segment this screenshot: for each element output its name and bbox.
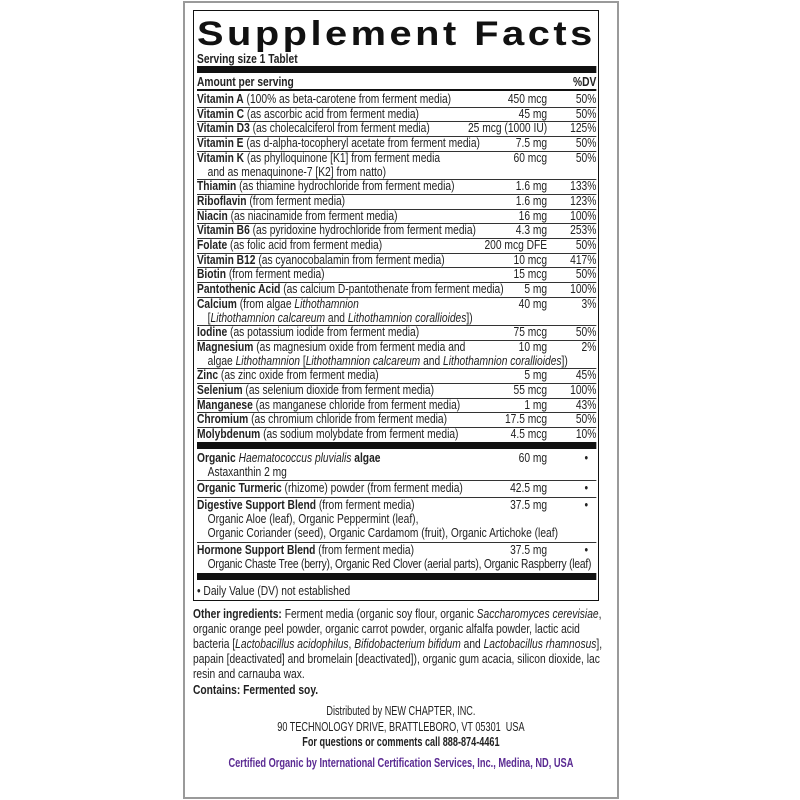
nutrient table [197, 92, 596, 441]
botanical table: Organic Chaste Tree (berry), Organic Red Clover (aerial parts), Organic Raspberry (leaf) [208, 557, 591, 571]
nutrient table: 10% [576, 427, 596, 441]
nutrient table: Vitamin E (as d-alpha-tocopheryl acetate from ferment media) [197, 136, 480, 150]
nutrient table: 16 mg [519, 209, 547, 223]
botanical table: • [585, 543, 588, 557]
nutrient table: Biotin (from ferment media) [197, 267, 325, 281]
nutrient table: Zinc (as zinc oxide from ferment media) [197, 368, 379, 382]
nutrient table: 50% [576, 92, 596, 106]
nutrient table: 50% [576, 238, 596, 252]
nutrient table: 1.6 mg [516, 194, 547, 208]
botanical table: • [585, 498, 588, 512]
botanical table: Astaxanthin 2 mg [208, 465, 287, 479]
distributor info: 90 TECHNOLOGY DRIVE, BRATTLEBORO, VT 05301 USA [277, 720, 525, 734]
other ingredients text: Other ingredients: Ferment media (organic soy flour, organic Saccharomyces cerevisiae, [193, 607, 601, 621]
panel: supplement facts box [193, 10, 599, 601]
nutrient table: 10 mcg [514, 253, 547, 267]
nutrient table: Folate (as folic acid from ferment media) [197, 238, 382, 252]
botanical table: Hormone Support Blend (from ferment media) [197, 543, 414, 557]
other ingredients text: resin and carnauba wax. [193, 667, 305, 681]
nutrient table: 10 mg [519, 340, 547, 354]
contains statement: Contains: Fermented soy. [193, 683, 318, 697]
nutrient table: 4.5 mcg [511, 427, 547, 441]
nutrient table: 55 mcg [514, 383, 547, 397]
nutrient table: Vitamin B12 (as cyanocobalamin from ferment media) [197, 253, 445, 267]
nutrient table: 100% [570, 282, 596, 296]
nutrient table: Vitamin K (as phylloquinone [K1] from ferment media [197, 151, 440, 165]
botanical table: 42.5 mg [510, 481, 547, 495]
serving size: Serving size 1 Tablet [197, 52, 298, 66]
nutrient table: 50% [576, 412, 596, 426]
nutrient table: Selenium (as selenium dioxide from ferment media) [197, 383, 434, 397]
nutrient table: 45% [576, 368, 596, 382]
nutrient table: 40 mg [519, 297, 547, 311]
nutrient table: 417% [570, 253, 596, 267]
title: Supplement Facts [197, 15, 596, 53]
nutrient table: 75 mcg [514, 325, 547, 339]
thick bar [197, 573, 596, 580]
other ingredients text: organic orange peel powder, organic carrot powder, organic alfalfa powder, lactic acid [193, 622, 580, 636]
botanical table: • [585, 481, 588, 495]
nutrient table: 100% [570, 383, 596, 397]
nutrient table: Riboflavin (from ferment media) [197, 194, 345, 208]
nutrient table: Vitamin B6 (as pyridoxine hydrochloride from ferment media) [197, 223, 476, 237]
table content [197, 52, 596, 598]
nutrient table: 100% [570, 209, 596, 223]
nutrient table: 45 mg [519, 107, 547, 121]
nutrient table: algae Lithothamnion [Lithothamnion calcareum and Lithothamnion corallioides]) [208, 354, 568, 368]
footnote: • Daily Value (DV) not established [197, 584, 350, 598]
nutrient table: Pantothenic Acid (as calcium D-pantothenate from ferment media) [197, 282, 504, 296]
nutrient table: Calcium (from algae Lithothamnion [197, 297, 359, 311]
nutrient table: 60 mcg [514, 151, 547, 165]
distributor info [277, 704, 525, 749]
botanical table: Organic Haematococcus pluvialis algae [197, 451, 380, 465]
botanical table: 37.5 mg [510, 543, 547, 557]
nutrient table: 17.5 mcg [505, 412, 547, 426]
nutrient table: 7.5 mg [516, 136, 547, 150]
certification: Certified Organic by International Certification Services, Inc., Medina, ND, USA [228, 756, 573, 770]
nutrient table: 2% [582, 340, 596, 354]
nutrient table: 450 mcg [508, 92, 547, 106]
nutrient table: 43% [576, 398, 596, 412]
nutrient table: 50% [576, 151, 596, 165]
nutrient table: Thiamin (as thiamine hydrochloride from ferment media) [197, 179, 454, 193]
nutrient table: 1 mg [524, 398, 547, 412]
nutrient table: 50% [576, 136, 596, 150]
nutrient table: 123% [570, 194, 596, 208]
nutrient table: 50% [576, 325, 596, 339]
nutrient table: 15 mcg [514, 267, 547, 281]
botanical table [197, 451, 596, 571]
botanical table: • [585, 451, 588, 465]
botanical table: 37.5 mg [510, 498, 547, 512]
header row [197, 75, 596, 91]
nutrient table: Vitamin C (as ascorbic acid from ferment media) [197, 107, 419, 121]
nutrient table: 25 mcg (1000 IU) [468, 121, 547, 135]
nutrient table: Vitamin A (100% as beta-carotene from ferment media) [197, 92, 451, 106]
outer frame [183, 1, 619, 799]
nutrient table: Vitamin D3 (as cholecalciferol from ferment media) [197, 121, 430, 135]
other ingredients text [193, 607, 602, 681]
botanical table: Organic Turmeric (rhizome) powder (from ferment media) [197, 481, 463, 495]
other ingredients text: bacteria [Lactobacillus acidophilus, Bifidobacterium bifidum and Lactobacillus rhamnosus], [193, 637, 602, 651]
nutrient table: 133% [570, 179, 596, 193]
botanical table: Organic Aloe (leaf), Organic Peppermint (leaf), [208, 512, 418, 526]
nutrient table: Niacin (as niacinamide from ferment media) [197, 209, 398, 223]
distributor info: Distributed by NEW CHAPTER, INC. [326, 704, 475, 718]
nutrient table: 4.3 mg [516, 223, 547, 237]
nutrient table: 50% [576, 107, 596, 121]
nutrient table: [Lithothamnion calcareum and Lithothamnion corallioides]) [208, 311, 473, 325]
nutrient table: Manganese (as manganese chloride from ferment media) [197, 398, 460, 412]
thick bar [197, 66, 596, 73]
botanical table: 60 mg [519, 451, 547, 465]
header row: Amount per serving [197, 75, 294, 89]
nutrient table: 50% [576, 267, 596, 281]
nutrient table: 200 mcg DFE [484, 238, 547, 252]
nutrient table: Iodine (as potassium iodide from ferment media) [197, 325, 419, 339]
nutrient table: 5 mg [524, 368, 547, 382]
header row: %DV [573, 75, 596, 89]
nutrient table: 125% [570, 121, 596, 135]
other ingredients text: papain [deactivated] and bromelain [deactivated]), organic gum acacia, silicon dioxide, lac [193, 652, 600, 666]
distributor info: For questions or comments call 888-874-4461 [302, 735, 500, 749]
thick bar [197, 442, 596, 449]
nutrient table: 253% [570, 223, 596, 237]
nutrient table: Molybdenum (as sodium molybdate from ferment media) [197, 427, 458, 441]
nutrient table: 3% [582, 297, 596, 311]
botanical table: Digestive Support Blend (from ferment media) [197, 498, 415, 512]
botanical table: Organic Coriander (seed), Organic Cardamom (fruit), Organic Artichoke (leaf) [208, 526, 558, 540]
nutrient table: 5 mg [524, 282, 547, 296]
nutrient table: and as menaquinone-7 [K2] from natto) [208, 165, 386, 179]
nutrient table: 1.6 mg [516, 179, 547, 193]
nutrient table: Chromium (as chromium chloride from ferment media) [197, 412, 447, 426]
nutrient table: Magnesium (as magnesium oxide from ferment media and [197, 340, 465, 354]
